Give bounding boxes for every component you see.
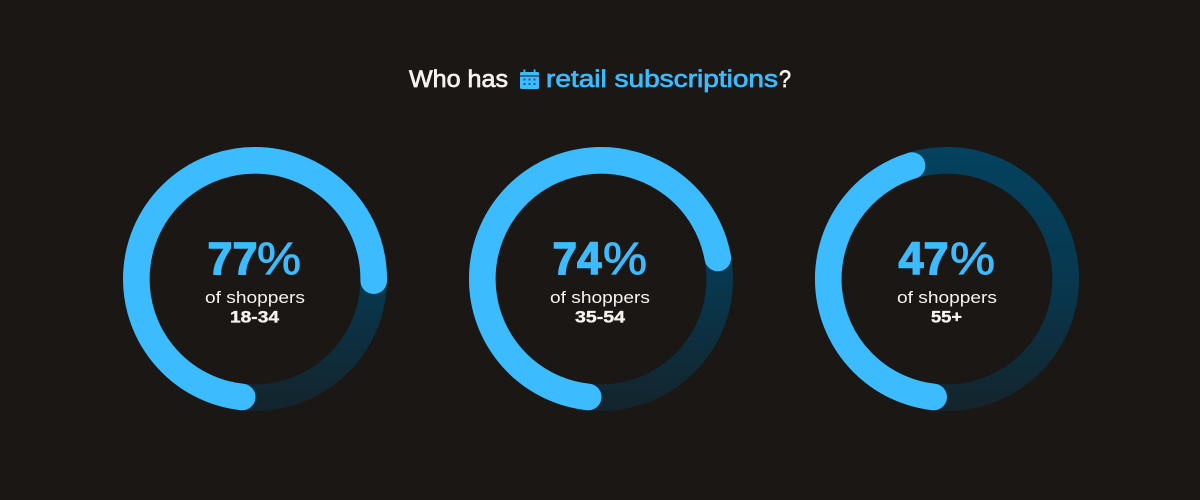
age group: 55+ (931, 308, 962, 326)
value (898, 233, 995, 284)
value: % (950, 233, 995, 284)
title: retail subscriptions (546, 66, 778, 93)
title (409, 66, 791, 93)
value: 74 (552, 233, 602, 284)
caption: of shoppers (550, 288, 650, 307)
value: % (603, 233, 647, 284)
value (552, 233, 647, 284)
value (208, 233, 301, 284)
value: % (257, 233, 301, 284)
caption: of shoppers (897, 288, 997, 307)
value: 47 (898, 233, 948, 284)
caption: of shoppers (205, 288, 305, 307)
value: 77 (208, 233, 258, 284)
title: ? (779, 66, 791, 93)
title: Who has (409, 66, 508, 93)
donut: 74% of shoppers 35-54 (482, 160, 720, 398)
age group: 35-54 (575, 308, 626, 326)
age group: 18-34 (230, 308, 280, 326)
icon: calendar (520, 70, 539, 89)
donut: 47% of shoppers 55+ (828, 160, 1066, 398)
donut: 77% of shoppers 18-34 (136, 160, 374, 398)
